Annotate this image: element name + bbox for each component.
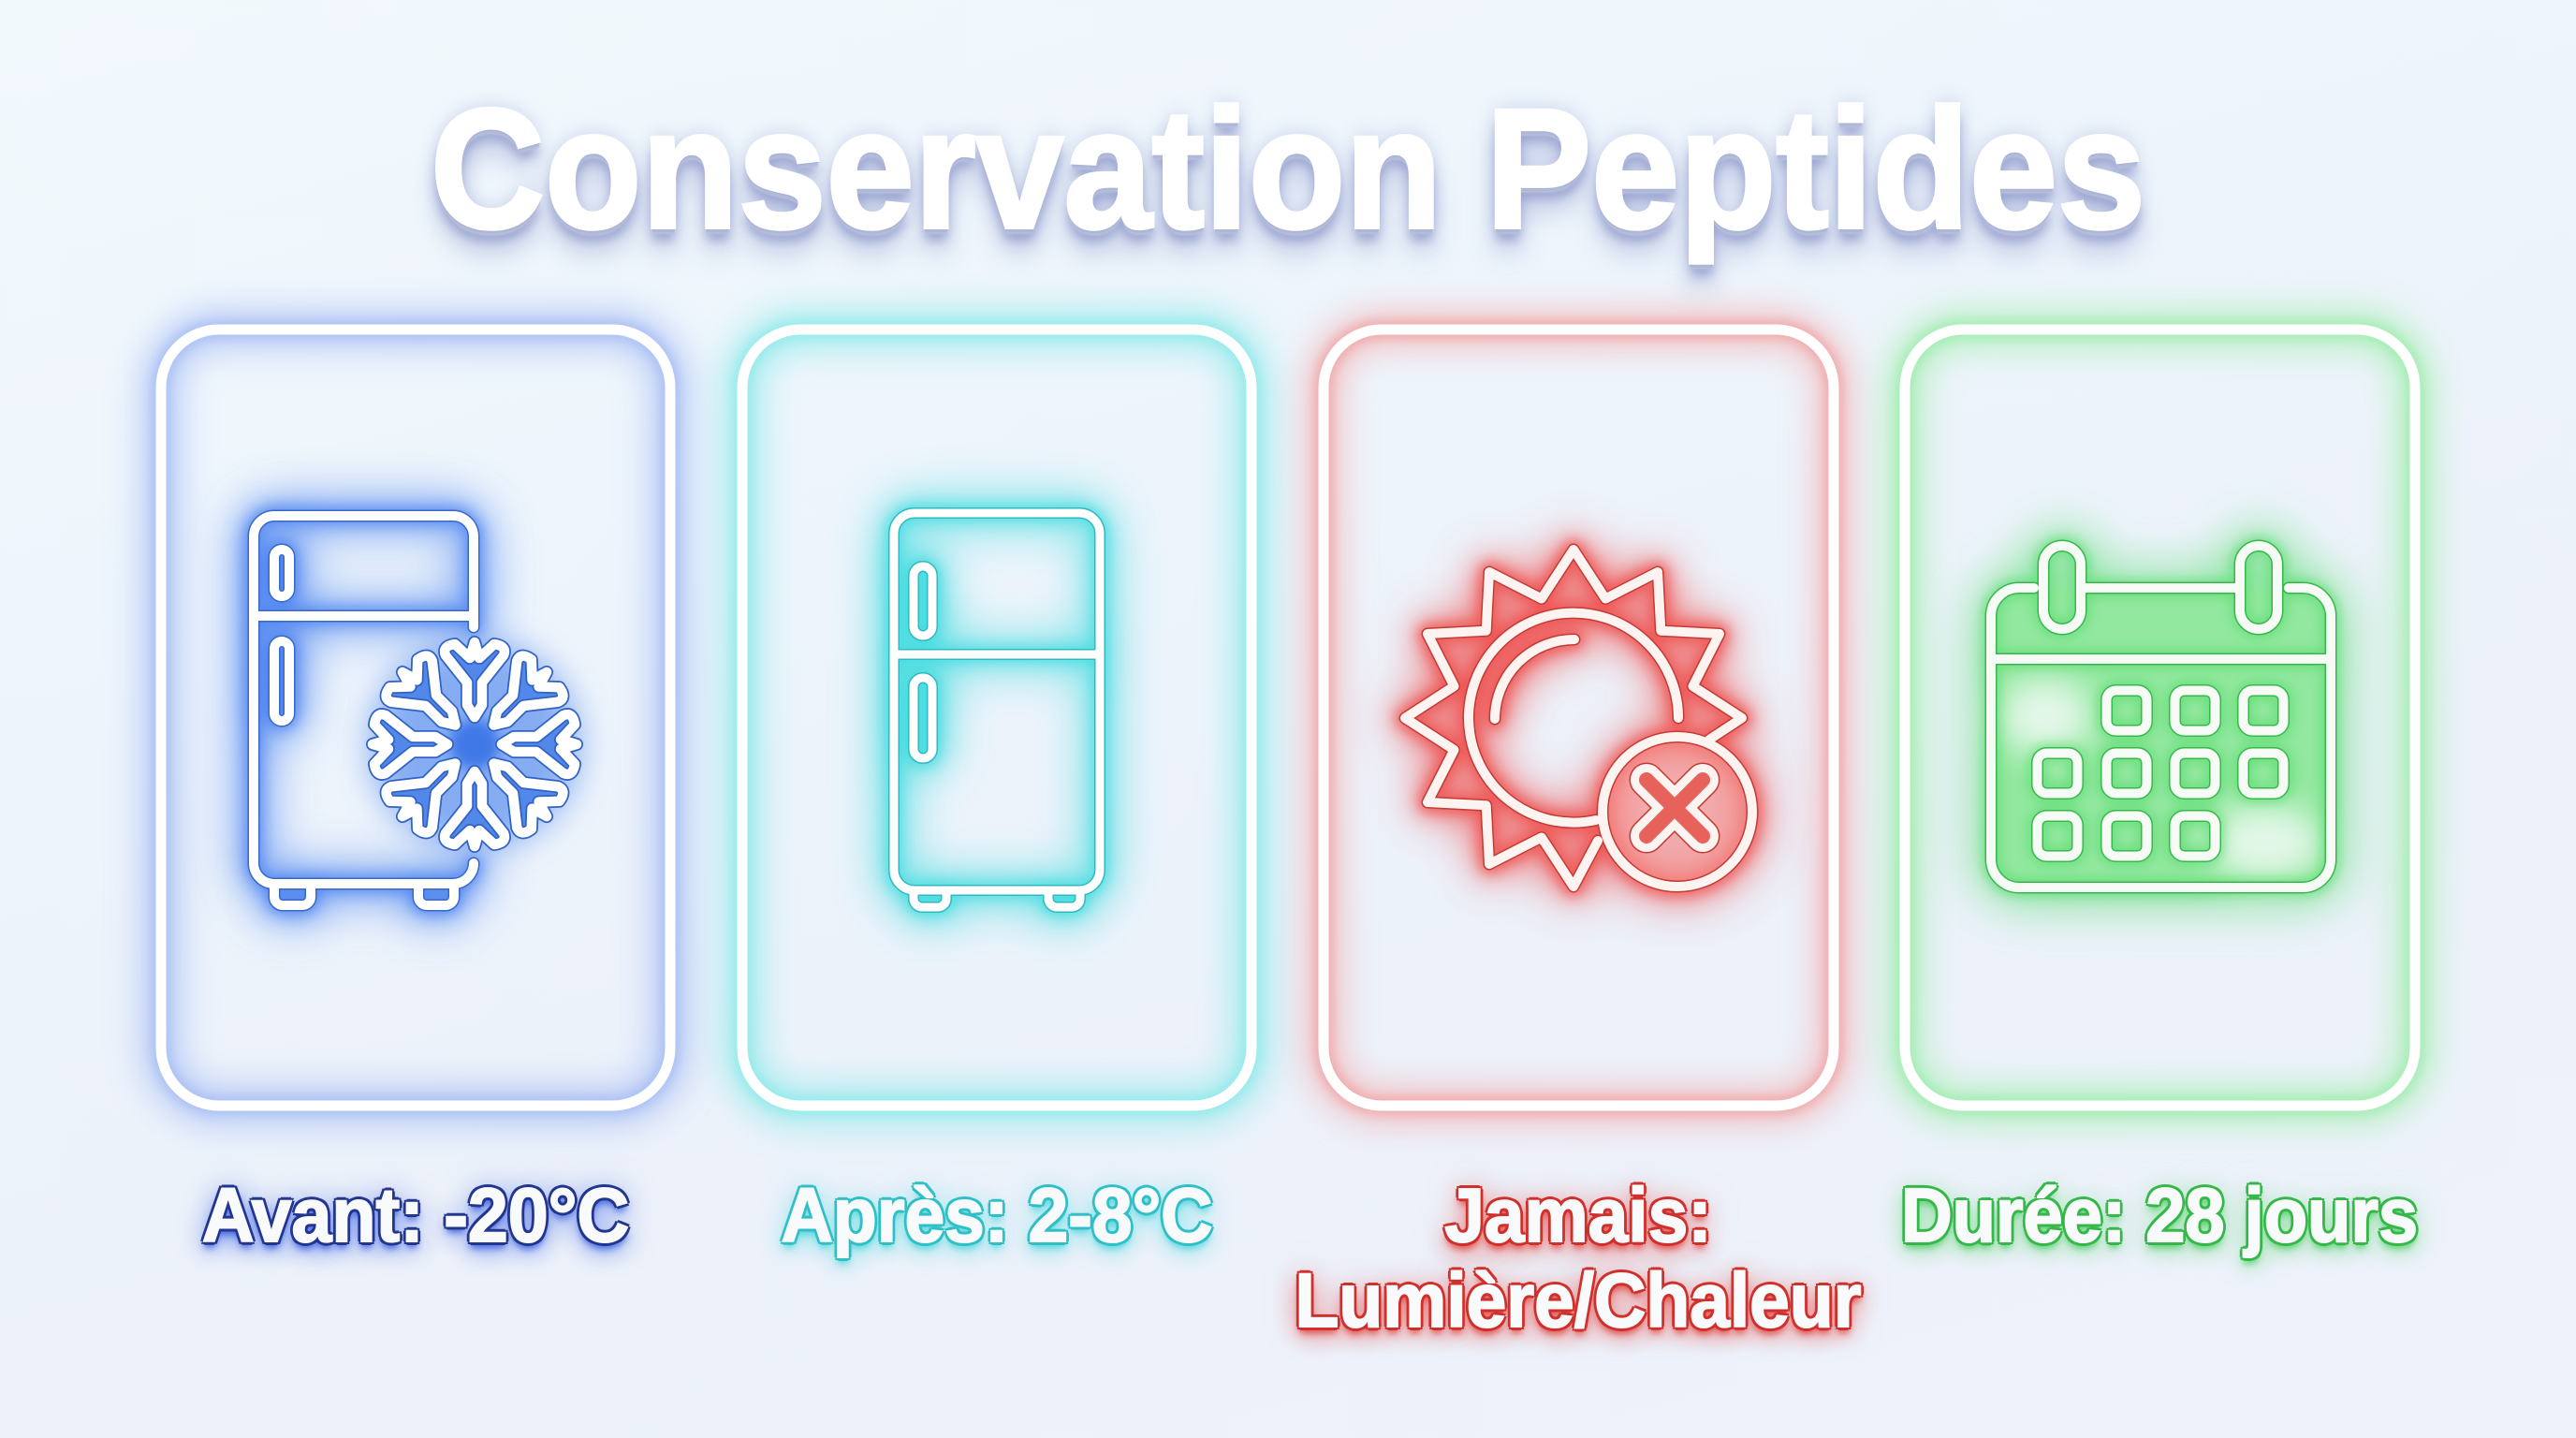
label: Jamais [1279, 1173, 1875, 1353]
label: Après: Après: 2-8°C [781, 1173, 1212, 1258]
label: Avant: Avant: -20°C [202, 1173, 629, 1258]
icon: snowflake [373, 642, 577, 846]
panel: Jamais Lumière/Chaleur card [1324, 330, 1834, 1106]
panel: Après 2-8°C card [742, 330, 1251, 1106]
label: Jamais: Lumière/Chaleur [1295, 1258, 1862, 1343]
icon: x mark [1647, 780, 1703, 836]
icon: fridge [894, 513, 1100, 907]
panel: Avant -20°C card [161, 330, 670, 1106]
icon: sun crossed out [1405, 550, 1752, 887]
icon: calendar [1991, 546, 2331, 888]
panel: Durée 28 jours card [1905, 330, 2415, 1106]
label: Durée: Durée: 28 jours [1901, 1173, 2418, 1258]
label: Jamais: Jamais: [1444, 1173, 1712, 1258]
title: Conservation Peptides [431, 73, 2145, 264]
icon: fridge with snowflake [254, 516, 579, 905]
